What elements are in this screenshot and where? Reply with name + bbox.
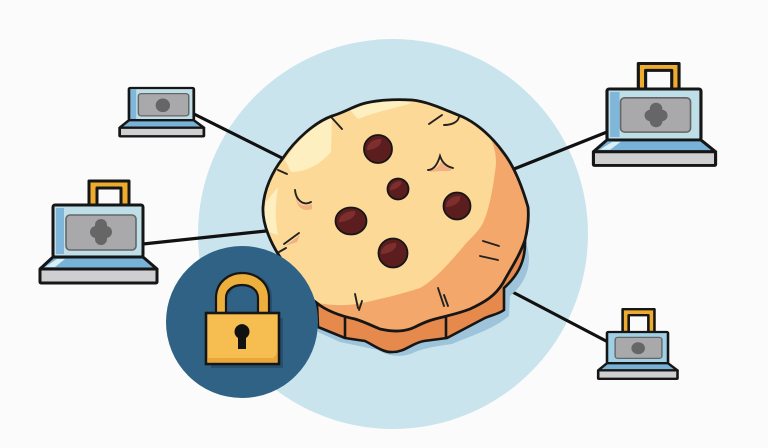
laptop: top right with handle <box>593 64 716 165</box>
padlock body shading <box>208 350 277 362</box>
cookie top <box>263 100 528 331</box>
padlock shackle <box>216 273 269 314</box>
cookie orange crescent <box>317 137 528 331</box>
connector lines <box>143 114 608 342</box>
background circle <box>198 39 588 429</box>
cookie shadow <box>318 240 529 356</box>
chocolate chip 5 <box>378 238 408 268</box>
chocolate chip 2 <box>388 178 408 200</box>
chocolate chip 1 <box>364 135 392 163</box>
cookie outline <box>263 100 528 331</box>
cookie crack marks <box>278 115 499 310</box>
laptop: bottom right with handle <box>598 309 678 379</box>
chocolate chip 3 <box>444 192 470 220</box>
keyhole <box>235 324 250 349</box>
laptop: top left <box>120 88 204 136</box>
cookie <box>263 100 529 356</box>
laptop: left with handle <box>40 181 157 283</box>
badge circle <box>166 246 318 398</box>
cookie crack shading <box>285 160 453 246</box>
cookie side ridges <box>345 316 446 338</box>
cookie bottom layer <box>317 240 525 352</box>
lock badge <box>166 246 318 398</box>
padlock shadow <box>211 273 283 368</box>
chocolate chip 4 <box>336 208 366 234</box>
padlock body <box>206 313 279 364</box>
cookie highlights <box>264 101 412 235</box>
